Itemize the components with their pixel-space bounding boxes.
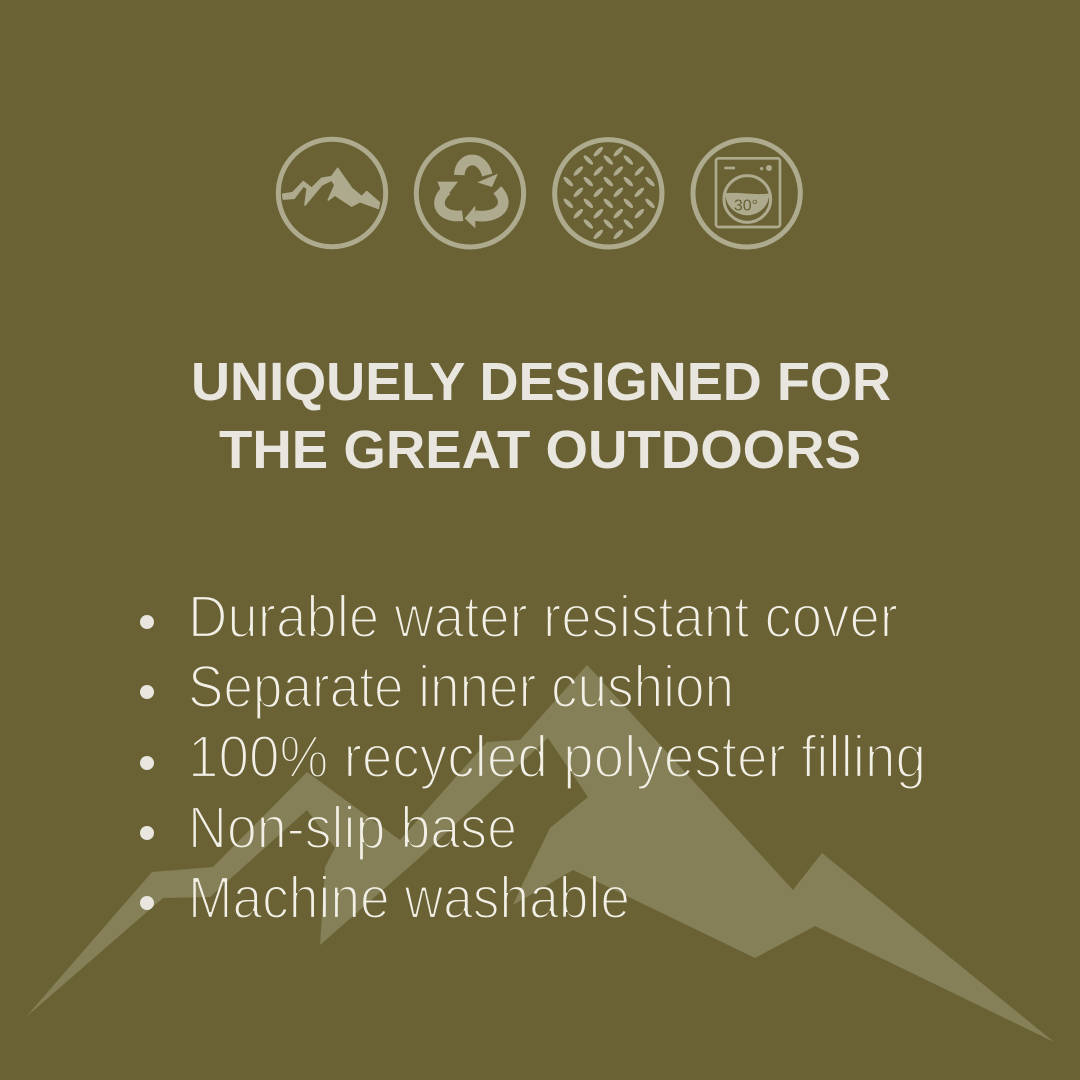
bullet list	[140, 584, 926, 931]
icon: mountain badge	[278, 139, 386, 247]
bullet: non-slip base	[140, 806, 514, 860]
icon: washing machine 30 degrees badge: 30°	[734, 198, 758, 215]
bullet: water resistant cover	[140, 595, 896, 636]
icon: recycling badge	[416, 140, 524, 247]
icon: washing machine 30 degrees badge	[693, 140, 800, 247]
title: UNIQUELY DESIGNED FOR	[191, 352, 891, 412]
bullet: machine washable	[140, 876, 627, 918]
title: THE GREAT OUTDOORS	[219, 420, 861, 480]
icon: non-slip tread badge	[555, 140, 662, 247]
bullet: inner cushion: Separate inner cushion	[188, 654, 734, 720]
title	[191, 352, 891, 480]
icon row	[278, 139, 800, 247]
bullet: inner cushion	[140, 665, 730, 718]
background mountain watermark	[26, 665, 1054, 1042]
bullet: water resistant cover: Durable water resistant cover	[188, 584, 898, 650]
bullet: machine washable: Machine washable	[188, 865, 630, 931]
bullet: non-slip base: Non-slip base	[188, 795, 517, 861]
bullet: recycled filling: 100% recycled polyester filling	[188, 724, 926, 790]
